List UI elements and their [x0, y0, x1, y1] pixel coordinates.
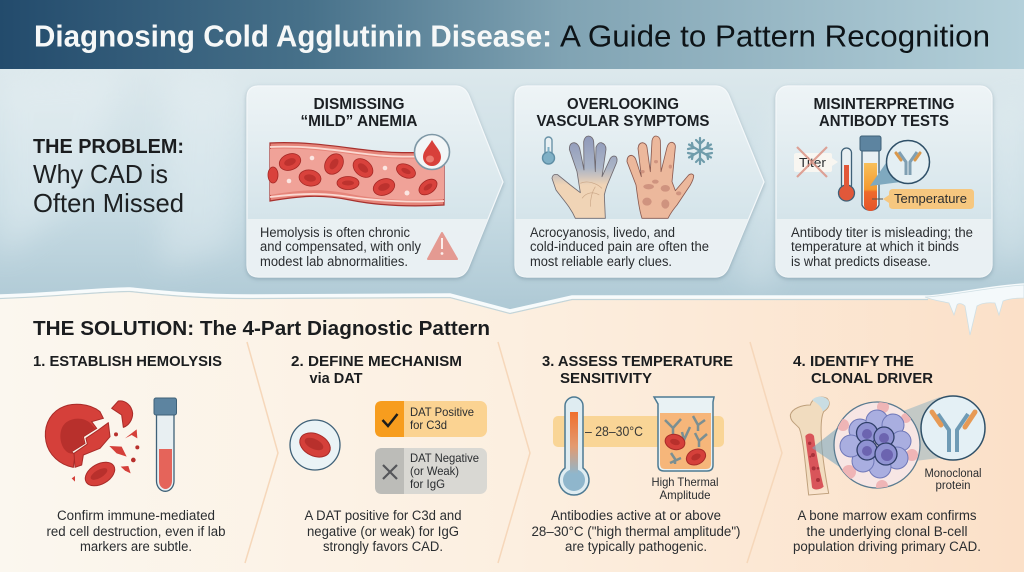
- heading: the problem: Often Missed: [33, 188, 184, 218]
- text: anemia description: modest lab abnormalities.: [260, 254, 408, 269]
- badge: DAT positive: for C3d: [410, 418, 447, 432]
- badge: DAT negative: DAT Negative: [410, 451, 479, 465]
- badge: DAT negative: (or Weak): [410, 464, 459, 478]
- label: high thermal amplitude: Amplitude: [660, 488, 711, 502]
- heading: dismissing mild anemia: DISMISSING: [314, 96, 404, 113]
- text: antibody description: [791, 225, 973, 269]
- heading: step 4: 4. IDENTIFY THE: [793, 353, 914, 370]
- step 3: assess temperature sensitivity: [532, 353, 740, 554]
- heading: misinterpreting antibody tests: MISINTERPRETING: [814, 96, 954, 113]
- icon: beaker with antibodies and red cells: [654, 397, 714, 471]
- text: vascular description: Acrocyanosis, livedo, and: [530, 225, 675, 240]
- text: step 3 description: 28–30°C ("high thermal amplitude"): [532, 524, 740, 539]
- badge: DAT negative: for IgG: [410, 477, 445, 491]
- icon: blood vessel with red cells: [268, 134, 450, 206]
- icon: red cell in circle: [290, 420, 340, 470]
- title banner: A Guide to Pattern Recognition: [560, 20, 990, 54]
- text: vascular description: cold-induced pain are often the: [530, 239, 709, 254]
- icon: ruptured red cell: [45, 401, 139, 491]
- panel: overlooking vascular symptoms: [515, 86, 765, 277]
- heading: step 2: 2. DEFINE MECHANISM: [291, 353, 462, 370]
- icon: thermometer: [838, 148, 854, 201]
- label: monoclonal protein: [924, 468, 982, 492]
- heading: step 4: CLONAL DRIVER: [811, 370, 933, 387]
- panel: misinterpreting antibody tests: [776, 86, 992, 277]
- heading: step 1: 1. ESTABLISH HEMOLYSIS: [33, 353, 222, 370]
- heading: overlooking vascular symptoms: [536, 96, 710, 130]
- heading: the solution: THE SOLUTION: The 4-Part Diagnostic Pattern: [33, 318, 490, 340]
- icon: warning triangle: [428, 233, 457, 259]
- text: step 1 description: markers are subtle.: [80, 539, 192, 554]
- heading: step 4: [793, 353, 933, 387]
- text: step 1 description: Confirm immune-mediated: [57, 508, 215, 523]
- text: antibody description: temperature at which it binds: [791, 239, 959, 254]
- heading: overlooking vascular symptoms: VASCULAR SYMPTOMS: [536, 113, 710, 130]
- icon: icicles: [925, 285, 1024, 335]
- heading: misinterpreting antibody tests: [814, 96, 954, 130]
- panel: dismissing mild anemia: [247, 86, 507, 277]
- text: step 4 description: the underlying clonal B-cell: [806, 524, 968, 539]
- heading: misinterpreting antibody tests: ANTIBODY TESTS: [819, 113, 949, 130]
- icon: mottled red hand: [627, 136, 694, 218]
- heading: the problem: Why CAD is: [33, 159, 168, 189]
- label: monoclonal protein: protein: [936, 480, 970, 492]
- icon: test tube: [860, 136, 881, 211]
- title banner: [0, 0, 1024, 69]
- icon: cold thermometer: [542, 137, 554, 164]
- heading: the problem: [33, 136, 184, 218]
- text: anemia description: [260, 225, 421, 269]
- text: step 4 description: A bone marrow exam confirms: [798, 508, 977, 523]
- label: temperature: [872, 189, 974, 209]
- text: step 2 description: strongly favors CAD.: [323, 539, 443, 554]
- text: antibody description: is what predicts disease.: [791, 254, 931, 269]
- heading: overlooking vascular symptoms: OVERLOOKING: [567, 96, 679, 113]
- band: 28-30 degrees: [553, 416, 724, 447]
- icon: magnified antibody: [870, 140, 930, 186]
- text: step 3 description: are typically pathogenic.: [565, 539, 707, 554]
- label: high thermal amplitude: High Thermal: [652, 475, 718, 489]
- heading: step 2: via DAT: [310, 370, 362, 387]
- heading: step 3: SENSITIVITY: [560, 370, 652, 387]
- badge: DAT positive: DAT Positive: [410, 405, 474, 419]
- heading: step 3: [542, 353, 733, 387]
- text: vascular description: [530, 225, 709, 269]
- text: step 3 description: Antibodies active at or above: [551, 508, 721, 523]
- heading: the problem: THE PROBLEM:: [33, 136, 184, 158]
- text: anemia description: and compensated, with only: [260, 239, 421, 254]
- badge: DAT positive: [375, 401, 487, 437]
- text: step 2 description: A DAT positive for C3d and: [304, 508, 462, 523]
- text: step 1 description: red cell destruction, even if lab: [46, 524, 226, 539]
- icon: cold blue hand: [552, 136, 617, 218]
- heading: dismissing mild anemia: [300, 96, 418, 130]
- title banner: Diagnosing Cold Agglutinin Disease:: [34, 20, 552, 54]
- text: antibody description: Antibody titer is misleading; the: [791, 225, 973, 240]
- text: step 1 description: [46, 508, 226, 554]
- icon: monoclonal antibody: [921, 396, 985, 460]
- icon: bone with marrow: [790, 397, 829, 495]
- icon: crossed-out titer label: Titer: [799, 155, 827, 170]
- icon: magnified clonal cells: [812, 397, 940, 492]
- badge: DAT negative: [375, 448, 487, 494]
- text: step 2 description: [304, 508, 462, 554]
- text: step 4 description: [793, 508, 981, 554]
- step 1: establish hemolysis: [33, 353, 226, 554]
- text: vascular description: most reliable early clues.: [530, 254, 672, 269]
- heading: step 3: 3. ASSESS TEMPERATURE: [542, 353, 733, 370]
- panel: the solution background with icy edge: [0, 285, 1024, 572]
- text: step 2 description: negative (or weak) for IgG: [307, 524, 459, 539]
- step 4: identify the clonal driver: [790, 353, 985, 554]
- ice background: [0, 69, 1024, 314]
- label: high thermal amplitude: [652, 475, 718, 502]
- icon: thermometer: [559, 397, 589, 495]
- step 2: define mechanism via DAT: [290, 353, 487, 554]
- text: step 3 description: [532, 508, 740, 554]
- label: temperature: Temperature: [894, 192, 967, 206]
- icon: snowflake: [688, 138, 712, 164]
- text: step 4 description: population driving primary CAD.: [793, 539, 981, 554]
- heading: dismissing mild anemia: “MILD” ANEMIA: [300, 113, 418, 130]
- label: monoclonal protein: Monoclonal: [924, 468, 982, 480]
- band: 28-30 degrees: – 28–30°C: [585, 423, 643, 439]
- icon: blood test tube: [154, 398, 176, 491]
- heading: step 2: [291, 353, 462, 387]
- icon: blood drop badge: [414, 134, 450, 170]
- text: anemia description: Hemolysis is often chronic: [260, 225, 410, 240]
- icon: crossed-out titer label: [794, 147, 838, 177]
